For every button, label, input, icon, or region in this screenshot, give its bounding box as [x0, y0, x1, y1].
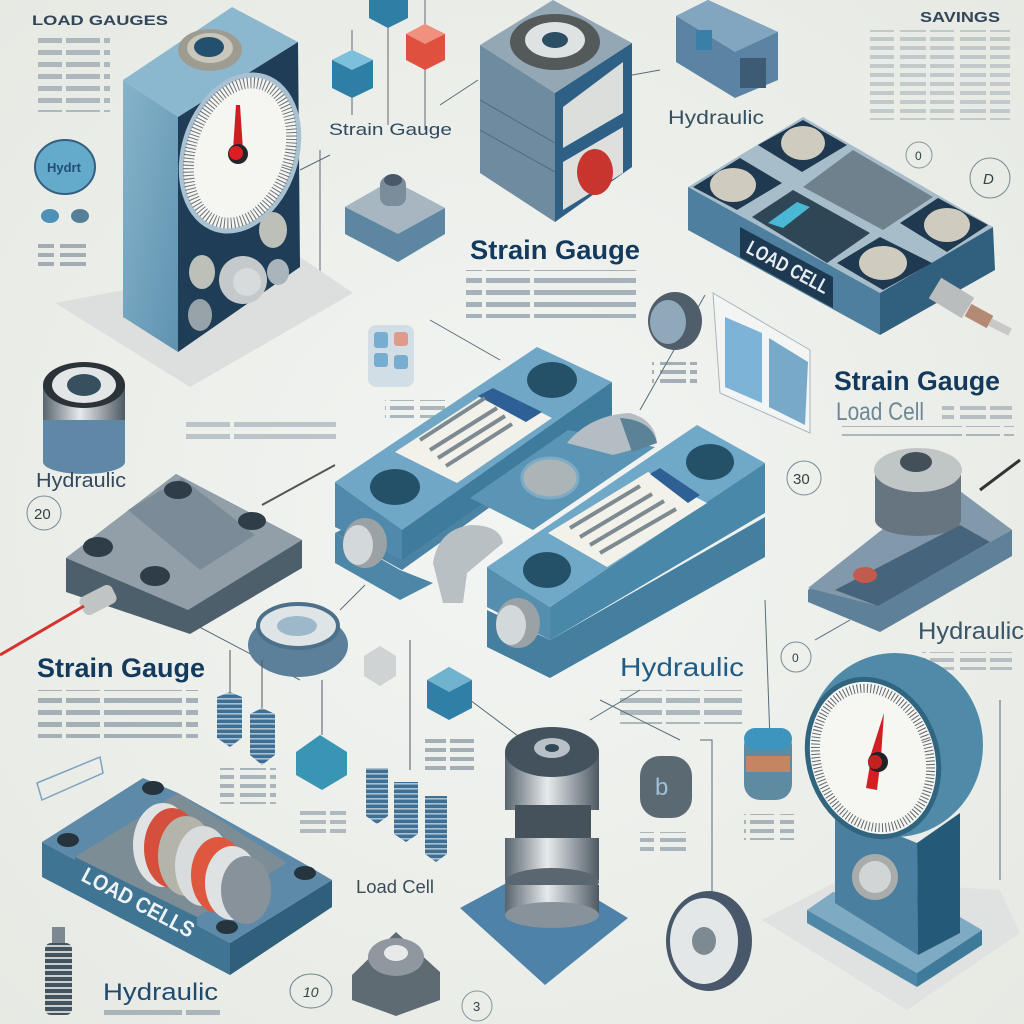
icon: blue badge: Hydrt	[47, 160, 82, 175]
number badge bottom: 10	[303, 984, 319, 1000]
text block: right	[942, 403, 1012, 421]
text block: strain gauge centre	[466, 270, 636, 318]
icon: small tag: b	[655, 774, 668, 801]
icon: load cells tray	[42, 778, 332, 975]
text block: small centre	[385, 400, 445, 418]
number badge: lower right	[781, 642, 811, 672]
text block: spring caption centre	[425, 738, 475, 774]
icon: sketch block	[37, 757, 103, 800]
heading: hydraulic left: Hydraulic	[36, 470, 126, 492]
number badges: top right: 0	[915, 149, 922, 163]
text block: right lower	[842, 426, 1014, 436]
icon: dial load cell top left	[55, 7, 353, 387]
text block: capsule caption	[744, 814, 794, 840]
heading: hydraulic centre: Hydraulic	[620, 652, 744, 682]
icon: springs and cubes	[217, 640, 472, 862]
text block: left small	[38, 240, 88, 270]
text block: savings	[870, 30, 1010, 120]
icon: bearing left	[43, 362, 125, 474]
connector lines	[186, 70, 1000, 900]
text block: caption	[296, 806, 346, 838]
text block: centre left	[186, 416, 336, 446]
label: load cell on panel: LOAD CELL	[743, 237, 832, 299]
number badges: top right: D	[983, 171, 994, 188]
number badge bottom centre: 3	[473, 999, 480, 1014]
icon: stacked block top center	[480, 0, 632, 222]
icon: small tag	[640, 756, 692, 818]
icon: top cubes	[332, 0, 445, 130]
heading: load cell lower: Load Cell	[356, 877, 434, 897]
icon: centre gauge	[248, 604, 348, 677]
text block: strain gauge left	[38, 690, 198, 738]
heading: strain gauge load cell	[834, 366, 1000, 426]
text block: right hydraulic	[922, 652, 1012, 670]
heading: hydraulic top: Hydraulic	[668, 108, 764, 129]
text block: lens caption	[652, 362, 697, 384]
icon: right gauge	[762, 653, 1020, 1010]
heading: savings: SAVINGS	[920, 9, 1000, 26]
heading: strain gauge load cell: Load Cell	[836, 398, 924, 426]
heading: strain gauge left: Strain Gauge	[37, 653, 205, 683]
heading: strain gauge top: Strain Gauge	[329, 120, 452, 139]
text block: tag caption	[640, 832, 690, 856]
number badge left	[27, 496, 61, 530]
icon: small sketch	[368, 325, 414, 387]
number badges: top right	[906, 142, 1010, 198]
icon: small center piece	[345, 174, 445, 262]
icon: right camera cell	[808, 448, 1020, 632]
icon: load cell panel	[688, 117, 1010, 335]
number badge left: 20	[34, 506, 51, 523]
icon: small capsule	[744, 728, 792, 800]
icon: centre column	[460, 727, 628, 985]
heading: hydraulic bottom: Hydraulic	[103, 979, 218, 1006]
icon: coil bolt	[45, 927, 72, 1015]
icon: left hydraulic cell	[0, 465, 335, 655]
icon: main double load cell	[335, 347, 765, 678]
number badge right: 30	[793, 471, 810, 488]
number badge: lower right: 0	[792, 651, 799, 665]
icon: small cups	[41, 209, 89, 223]
heading: hydraulic right: Hydraulic	[918, 618, 1024, 645]
text block: bottom	[104, 1009, 220, 1019]
text block: spring captions	[220, 768, 276, 804]
number badge right	[787, 461, 821, 495]
icon: blue badge	[35, 140, 95, 194]
text block: hydraulic centre	[620, 690, 742, 724]
text block: top left	[38, 36, 110, 112]
heading: strain gauge load cell: Strain Gauge	[834, 366, 1000, 396]
icon: top right block	[676, 0, 778, 98]
heading: strain gauge centre: Strain Gauge	[470, 235, 640, 265]
icon: nut	[352, 932, 440, 1016]
number badge bottom	[290, 974, 332, 1008]
icon: round lens	[648, 292, 702, 350]
label: load cells on tray: LOAD CELLS	[78, 862, 199, 943]
icon: bottom disc	[666, 891, 752, 991]
number badge bottom centre	[462, 991, 492, 1021]
heading: top left: LOAD GAUGES	[32, 12, 168, 28]
icon: document panel	[713, 293, 810, 433]
